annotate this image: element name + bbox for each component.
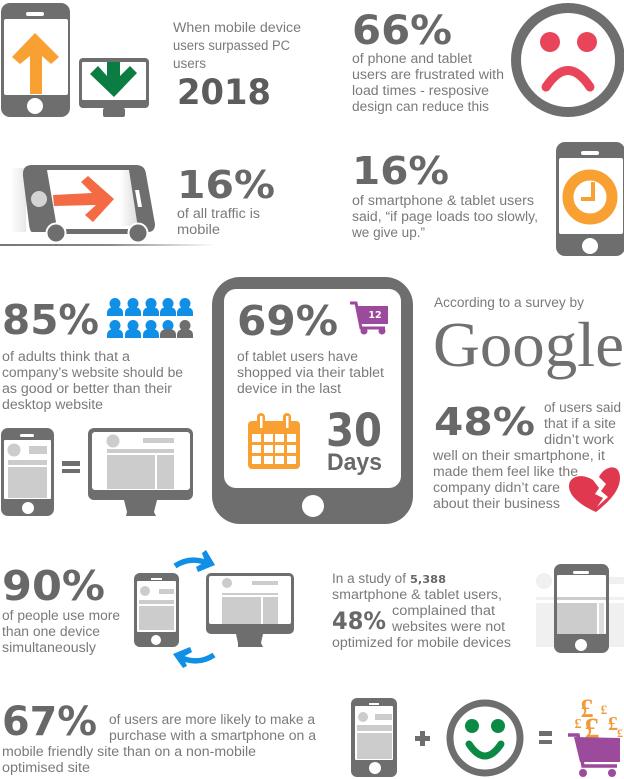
- icon: calendar: [248, 413, 300, 469]
- text: study of 5,388: optimized for mobile devices: [332, 635, 511, 650]
- text: 85% description: as good or better than their: [2, 381, 173, 396]
- icon: smiley face: [450, 703, 520, 773]
- text: 67% description: optimised site: [2, 760, 90, 775]
- text: 67% description: mobile friendly site than on a non-mobile: [2, 744, 256, 759]
- text: 67% description: purchase with a smartphone on a: [109, 728, 317, 743]
- panel: tablet 69%: [212, 277, 413, 524]
- text: when mobile users surpassed PC: [173, 20, 301, 71]
- text: 85% description: of adults think that a: [2, 349, 131, 364]
- text: study of 5,388: In a study of: [332, 571, 406, 586]
- heading: 85%: 85%: [2, 296, 99, 344]
- text: 90% description: simultaneously: [2, 640, 96, 655]
- text: study of 5,388: [332, 571, 511, 650]
- text: 85% description: [2, 349, 183, 412]
- text: 16% description: said, “if page loads too slowly,: [352, 209, 538, 224]
- text: 48% description: of users said: [544, 400, 621, 415]
- icon: phone wireframe: [1, 428, 54, 516]
- text: study of 5,388: 5,388: [410, 574, 446, 586]
- icon: shopping cart with pounds: £: [608, 713, 618, 735]
- text: 48% description: well on their smartphone, it: [432, 448, 605, 463]
- text: 66% description: [352, 51, 504, 114]
- text: 16% description: we give up.”: [351, 225, 425, 240]
- text: of all traffic is mobile: mobile: [177, 222, 220, 237]
- heading: 16% give up: 16%: [352, 149, 449, 193]
- text: when mobile users surpassed PC: users surpassed PC: [173, 38, 290, 53]
- arrow: top blue sync: [175, 550, 215, 572]
- icon: phone with clock: [556, 142, 624, 256]
- icon: equals sign bottom: [539, 731, 552, 744]
- icon: broken heart: [569, 467, 620, 512]
- heading: 2018: 2018: [177, 73, 271, 113]
- text: 69% description: shopped via their tablet: [237, 365, 384, 380]
- text: 48% description: company didn’t care: [433, 480, 560, 495]
- text: 66% description: load times - resposive: [352, 83, 489, 98]
- heading: 66%: 66%: [352, 8, 452, 54]
- icon: shopping cart with pounds: £: [580, 694, 594, 723]
- text: 66% description: users are frustrated with: [352, 67, 504, 82]
- icon: phone with orange up arrow: [1, 3, 70, 117]
- icon: purple cart with 12: 12: [368, 310, 382, 321]
- text: 48% description: that if a site: [544, 416, 616, 431]
- text: study of 5,388: complained that: [392, 603, 495, 618]
- text: 69% description: of tablet users have: [237, 349, 358, 364]
- icon: sad face: [516, 8, 620, 112]
- text: of all traffic is mobile: [177, 206, 260, 237]
- heading: 69%: 69%: [237, 297, 338, 345]
- icon: shopping cart with pounds: £: [584, 712, 600, 745]
- icon: purple cart with 12: [350, 303, 388, 334]
- icon: people 85 percent: [107, 298, 193, 338]
- icon: monitor with green down arrow: [79, 58, 149, 117]
- text: 85% description: desktop website: [2, 397, 103, 412]
- text: 90% description: than one device: [2, 624, 100, 639]
- icon: equals sign: [62, 461, 80, 473]
- text: Days: Days: [327, 449, 382, 476]
- icon: tilted phone on wheels with red arrow: [10, 165, 155, 242]
- text: 16% description: of smartphone & tablet users: [352, 193, 534, 208]
- text: 69% description: device in the last: [237, 381, 341, 396]
- text: 48% description: made them feel like the: [433, 464, 578, 479]
- ground line: [0, 244, 216, 246]
- icon: faded desktop layout behind phone: [536, 573, 624, 647]
- icon: phone wireframe small: [134, 573, 179, 647]
- heading: 67%: 67%: [2, 699, 97, 745]
- text: 48% description: didn’t work: [544, 432, 614, 447]
- text: 90% description: [2, 608, 120, 655]
- text: according to a survey: According to a survey by: [434, 295, 584, 310]
- text: 67% description: [2, 712, 317, 775]
- heading: 30: 30: [326, 404, 382, 457]
- text: 69% description: [237, 349, 384, 396]
- text: of all traffic is mobile: of all traffic is: [177, 206, 260, 221]
- text: 66% description: design can reduce this: [352, 99, 489, 114]
- heading: 90%: 90%: [2, 562, 105, 610]
- text: 16% description: [351, 193, 538, 240]
- text: study of 5,388: websites were not: [391, 619, 505, 634]
- text: 48% description: [432, 400, 621, 511]
- text: when mobile users surpassed PC: users: [173, 56, 206, 71]
- icon: shopping cart with pounds: £: [601, 702, 608, 717]
- arrow: bottom blue sync: [173, 647, 214, 668]
- heading: 48%: 48%: [434, 400, 535, 444]
- logo text: Google: Google: [433, 309, 624, 380]
- icon: phone wireframe bottom: [351, 698, 397, 777]
- icon: phone over faded layout: [554, 564, 609, 653]
- heading: 48% study: 48%: [332, 607, 386, 635]
- text: 67% description: of users are more likely to make a: [109, 712, 315, 727]
- icon: plus sign: [415, 731, 430, 746]
- icon: monitor wireframe small: [206, 573, 294, 647]
- text: when mobile users surpassed PC: When mobile device: [173, 20, 301, 35]
- text: 90% description: of people use more: [2, 608, 120, 623]
- icon: shopping cart with pounds: £: [617, 726, 623, 740]
- text: 85% description: company’s website should be: [2, 365, 183, 380]
- icon: shopping cart with pounds: £: [574, 717, 582, 732]
- text: 66% description: of phone and tablet: [352, 51, 472, 66]
- icon: desktop wireframe: [88, 428, 193, 516]
- text: study of 5,388: smartphone & tablet users,: [332, 587, 502, 602]
- heading: 16% traffic: 16%: [177, 163, 275, 207]
- icon: shopping cart with pounds: [568, 694, 623, 777]
- text: 48% description: about their business: [433, 496, 560, 511]
